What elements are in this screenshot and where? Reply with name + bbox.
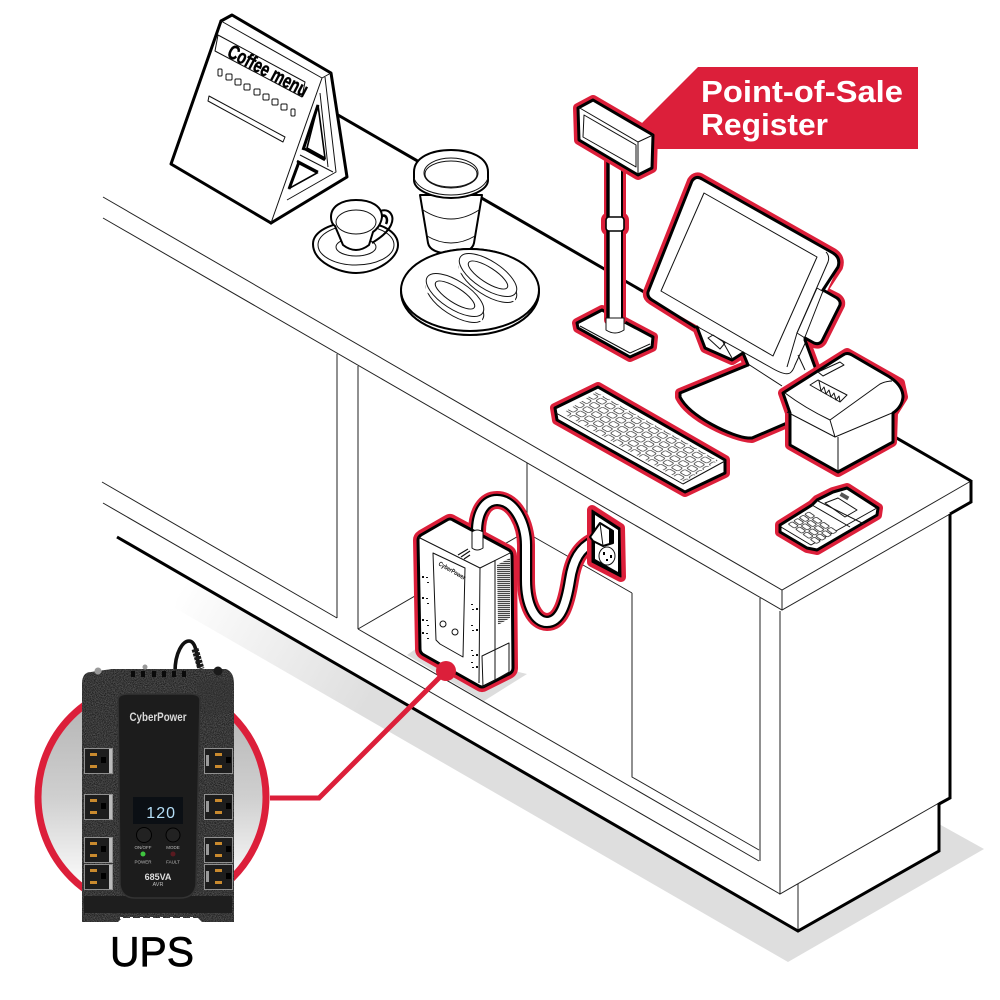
top vents and screws bbox=[131, 671, 186, 677]
cup bowl bbox=[331, 200, 382, 250]
cup body bbox=[420, 195, 482, 254]
plate bbox=[401, 249, 539, 335]
POS terminal bbox=[648, 177, 840, 438]
socket bbox=[599, 547, 615, 565]
UPS front panel bbox=[433, 553, 465, 657]
button labels: FAULT bbox=[166, 860, 180, 864]
countertop right edge bbox=[950, 480, 971, 514]
cord plug bbox=[472, 530, 483, 550]
button labels: ON/OFF bbox=[134, 845, 152, 850]
UPS outlets bbox=[422, 576, 478, 668]
card reader bbox=[797, 288, 840, 344]
callout banner: Point-of-Sale Register: Register bbox=[701, 107, 828, 142]
UPS label: UPS bbox=[110, 928, 194, 975]
cup lid bbox=[414, 150, 488, 198]
monitor lower edge bbox=[698, 252, 829, 374]
UPS edges bbox=[418, 537, 512, 683]
device body bbox=[82, 669, 234, 922]
banner text: Point-of-Sale bbox=[701, 74, 903, 109]
floor shadow bbox=[175, 573, 984, 962]
receipt printer bbox=[783, 353, 903, 472]
cabinet base lines bbox=[102, 482, 780, 894]
pastry two bbox=[453, 245, 523, 311]
power cord bbox=[477, 500, 594, 622]
upper window bbox=[307, 105, 325, 158]
buttons bbox=[136, 828, 152, 842]
calculator keys bbox=[787, 511, 839, 545]
menu back frame bbox=[221, 15, 347, 223]
base bbox=[577, 310, 653, 357]
printer lines bbox=[785, 381, 892, 472]
keys bbox=[562, 392, 718, 482]
UPS product photo bbox=[82, 641, 234, 922]
calculator bbox=[780, 488, 878, 550]
red halo of stand bbox=[697, 327, 748, 365]
body facets bbox=[195, 680, 232, 716]
menu title strip bbox=[215, 35, 305, 97]
cabinet verticals bbox=[337, 354, 939, 894]
center panel bbox=[118, 694, 200, 898]
toe kick bbox=[797, 884, 799, 931]
plate with pastries bbox=[401, 245, 539, 335]
UPS vents bbox=[497, 558, 510, 625]
UPS brand: CyberPower bbox=[437, 561, 467, 582]
scene UPS bbox=[418, 500, 594, 687]
customer pole display bbox=[577, 100, 653, 357]
calculator screen bbox=[825, 498, 857, 517]
LCD display bbox=[133, 797, 183, 824]
white fills bbox=[680, 365, 787, 438]
menu bar bbox=[208, 96, 285, 142]
saucer bbox=[313, 222, 398, 273]
button labels: MODE bbox=[166, 845, 180, 850]
red circle halo behind product bbox=[38, 683, 266, 911]
leader line bbox=[38, 661, 456, 911]
plug bbox=[590, 523, 613, 546]
screen bbox=[661, 193, 817, 356]
menu items row bbox=[218, 69, 295, 116]
outlets left bbox=[84, 748, 112, 890]
lower window bbox=[290, 163, 317, 188]
button labels: POWER bbox=[134, 860, 152, 864]
pastry one bbox=[420, 265, 490, 331]
counter bbox=[102, 115, 971, 931]
countertop front edges bbox=[103, 197, 971, 610]
UPS top vents bbox=[458, 549, 470, 559]
stand base bbox=[680, 365, 787, 438]
pole bbox=[609, 160, 621, 320]
UPS product photo: AVR bbox=[153, 882, 163, 888]
bottom teeth bbox=[120, 917, 193, 919]
menu card bbox=[171, 21, 322, 223]
capacity: 685VA bbox=[145, 872, 172, 882]
coffee cup and saucer bbox=[313, 200, 398, 273]
button labels bbox=[134, 845, 180, 864]
countertop back edge bbox=[338, 115, 971, 481]
outlets right bbox=[204, 748, 232, 890]
callout banner: Point-of-Sale Register bbox=[642, 67, 918, 149]
UPS battery door bbox=[482, 643, 509, 687]
wall outlet bbox=[590, 510, 621, 577]
stand neck bbox=[697, 327, 748, 365]
cabinet side bbox=[939, 514, 950, 804]
LCD display: 120 bbox=[146, 805, 176, 822]
shadow under scene UPS bbox=[407, 648, 527, 701]
menu title: Coffee menu bbox=[224, 41, 312, 102]
keyboard bbox=[555, 387, 725, 492]
power cable bbox=[175, 641, 199, 672]
takeaway cup bbox=[414, 150, 488, 254]
touchscreen monitor bbox=[648, 177, 839, 373]
leader dot bbox=[436, 661, 456, 681]
coffee menu stand bbox=[171, 15, 347, 223]
brand: CyberPower bbox=[130, 712, 187, 724]
cup base bbox=[336, 238, 376, 256]
handle bbox=[372, 210, 392, 243]
status LEDs bbox=[140, 852, 146, 856]
UPS body bbox=[418, 519, 513, 687]
display head bbox=[578, 100, 653, 175]
